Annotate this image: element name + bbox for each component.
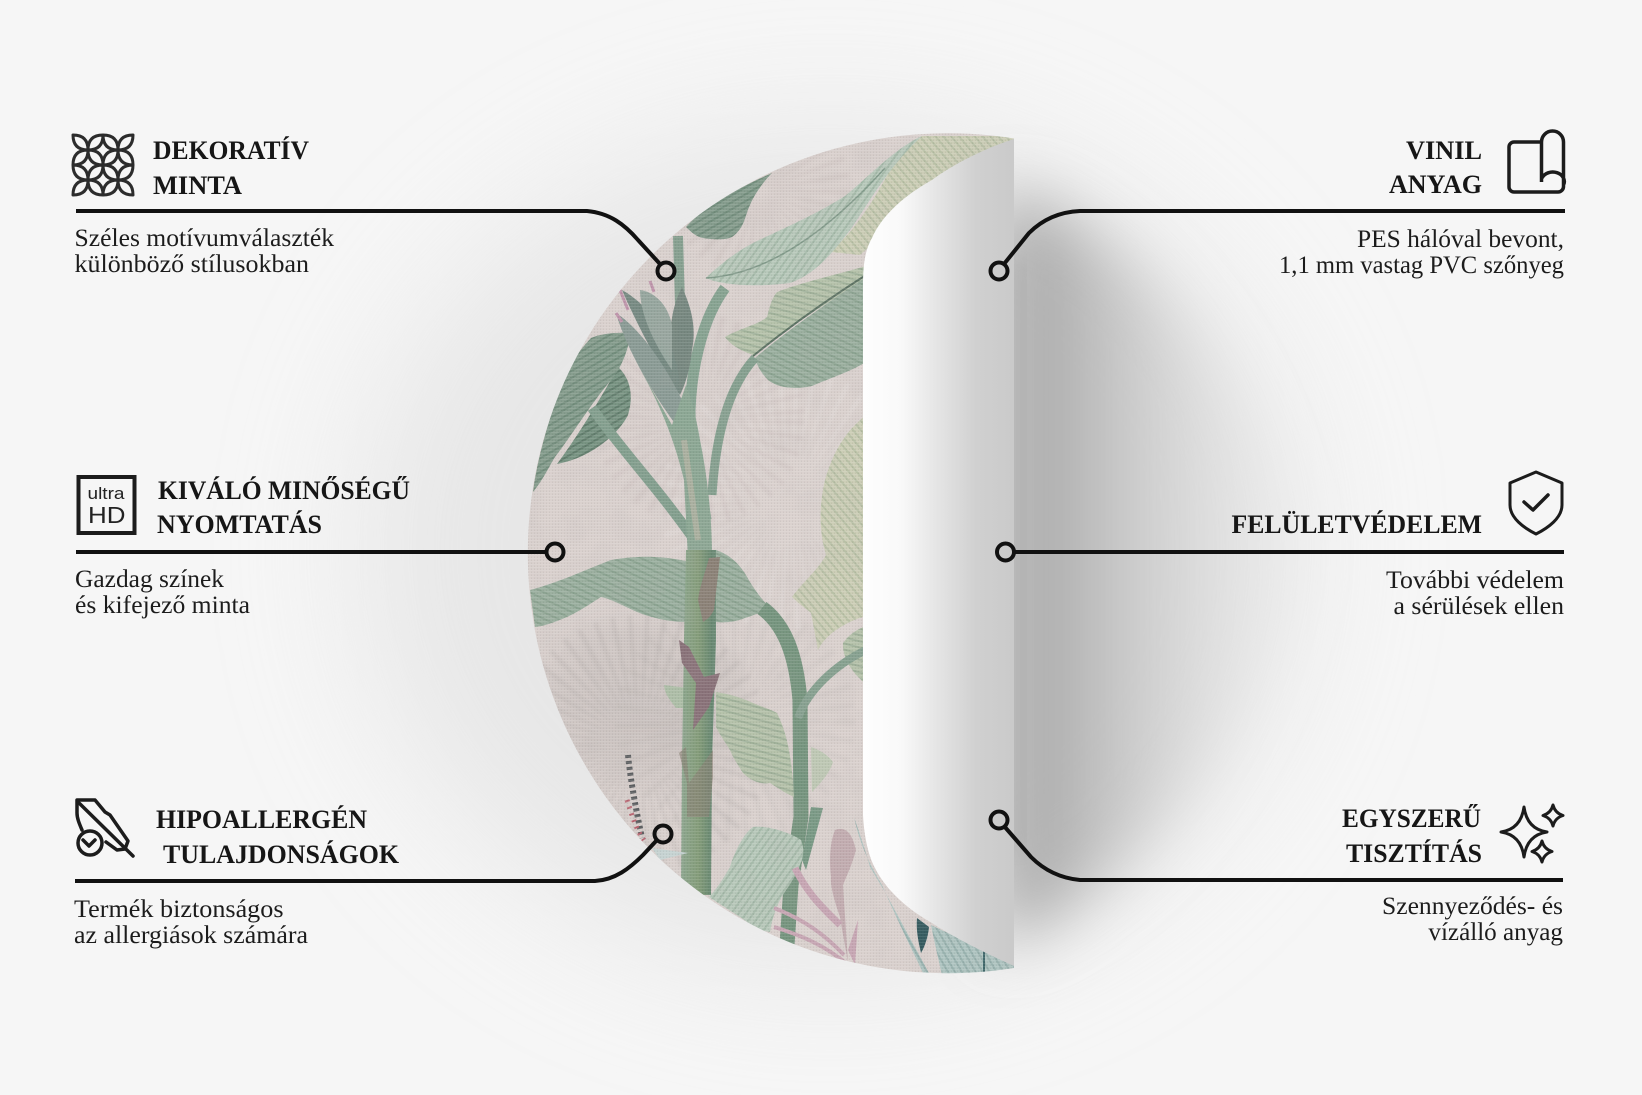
description: különböző stílusokban (74, 251, 310, 278)
description: Széles motívumválaszték (74, 225, 335, 252)
leaf: right darker half (753, 275, 866, 388)
heading: HIPOALLERGÉN (156, 805, 367, 834)
panel: Felületvédelem (997, 472, 1565, 620)
panel: Hipoallergén tulajdonságok (74, 800, 672, 949)
infographic canvas (72, 129, 1566, 974)
icon: vinyl roll (1509, 131, 1564, 192)
stem: right arched (712, 358, 755, 495)
icon: decorative pattern (73, 135, 133, 195)
panel: Kiváló minőségű nyomtatás (75, 476, 564, 619)
description (75, 566, 250, 619)
soft halo shadow (360, 130, 1300, 970)
leaf: small left of trunk (664, 685, 688, 708)
blue leaves (854, 817, 1016, 975)
sheath: middle (679, 640, 720, 730)
description: Szennyeződés- és (1382, 893, 1563, 920)
faded palm fans (543, 616, 764, 866)
heading: ANYAG (1389, 170, 1482, 199)
heading (153, 136, 309, 200)
printed botanical artwork (525, 130, 1020, 975)
description: Termék biztonságos (74, 896, 284, 923)
description: és kifejező minta (75, 592, 250, 619)
description: PES hálóval bevont, (1357, 226, 1564, 253)
description (74, 896, 308, 949)
heading: FELÜLETVÉDELEM (1232, 510, 1482, 539)
leaf: lower middle (716, 692, 794, 797)
leaf: top small dark (686, 173, 772, 239)
spike near bottom (802, 807, 823, 870)
leaf: bottom folded (709, 827, 803, 932)
branch stem (798, 650, 866, 718)
flower bud (616, 281, 694, 425)
leaf: right lower small (843, 626, 866, 684)
stem: central curved (690, 288, 725, 520)
sheath: lower (679, 747, 713, 817)
panel: Dekoratív minta (73, 135, 674, 280)
central upper stalk (638, 366, 712, 550)
leader line with marker (76, 211, 674, 280)
heading (1389, 136, 1482, 199)
leader line with marker (990, 211, 1565, 280)
leaf: left rear dark (557, 367, 631, 464)
icon: ultra HD: HD (88, 502, 126, 528)
heading: KIVÁLÓ MINŐSÉGŰ (158, 476, 410, 505)
heading: EGYSZERŰ (1342, 804, 1481, 833)
heading: DEKORATÍV (153, 136, 309, 165)
icon: sparkles (1501, 805, 1563, 862)
description (1279, 226, 1564, 279)
canvas texture (525, 130, 1020, 975)
trunk (681, 550, 716, 895)
pink flower (774, 829, 858, 965)
leader line with marker (76, 544, 564, 560)
heading: VINIL (1406, 136, 1482, 165)
leaf: top pale large (706, 136, 922, 285)
icon: feather with check (77, 800, 133, 856)
description (74, 225, 335, 278)
leaf: left large (533, 333, 630, 492)
curled white backing (863, 139, 1014, 966)
leaf: big horizontal left (530, 550, 772, 627)
leader line with marker (75, 826, 672, 881)
panel: Vinil anyag (990, 131, 1565, 280)
thin stem behind bud (678, 236, 680, 305)
heading (1342, 804, 1482, 868)
description: 1,1 mm vastag PVC szőnyeg (1279, 252, 1564, 279)
heading: TULAJDONSÁGOK (163, 840, 400, 869)
description: a sérülések ellen (1394, 593, 1565, 620)
heading (157, 476, 410, 539)
leaf: right tall striped (792, 415, 866, 650)
description: vízálló anyag (1428, 919, 1563, 946)
heading: MINTA (153, 171, 242, 200)
icon: ultra HD: ultra (88, 484, 125, 503)
leaf: small right of stalk (811, 747, 833, 792)
right stalk (762, 608, 801, 945)
description: az allergiások számára (74, 922, 308, 949)
leader line with marker (990, 812, 1563, 880)
grass spike (627, 755, 688, 860)
leaf: right upper light half (725, 266, 866, 355)
description: További védelem (1386, 567, 1565, 594)
icon: shield with check (1510, 472, 1562, 534)
heading: NYOMTATÁS (157, 510, 322, 539)
heading: TISZTÍTÁS (1346, 839, 1482, 868)
panel: Egyszerű tisztítás (990, 804, 1563, 946)
description (1386, 567, 1565, 620)
stem: left diagonal (588, 405, 687, 538)
heading (156, 805, 400, 869)
sheath: upper (698, 557, 720, 622)
description: Gazdag színek (75, 566, 224, 593)
leader line with marker (997, 544, 1564, 560)
icon: ultra HD (78, 477, 134, 533)
leaf: top yellow-green (831, 136, 1016, 255)
description (1382, 893, 1563, 946)
product: rolled round mat (525, 130, 1020, 975)
